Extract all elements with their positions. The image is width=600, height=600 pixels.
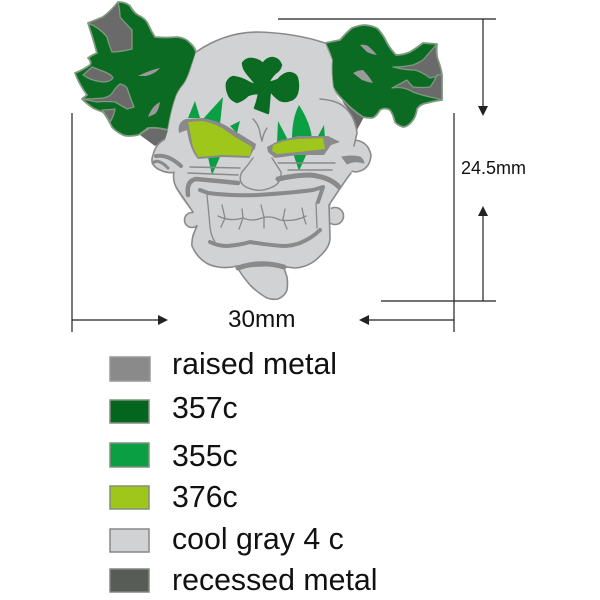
left hair	[75, 2, 196, 136]
upper lip and brow bands	[188, 175, 339, 246]
left hair recessed patches	[82, 2, 160, 122]
face	[165, 32, 356, 268]
legend: 357c	[110, 392, 238, 425]
ear details	[153, 156, 364, 168]
teeth lines	[207, 195, 317, 242]
left ear	[152, 136, 178, 173]
right hair recessed patches	[353, 45, 442, 100]
jaw bumps	[184, 212, 200, 228]
nose outline	[240, 158, 281, 190]
legend: 355c: 355c	[172, 440, 238, 473]
legend: recessed metal: recessed metal	[172, 564, 377, 597]
raised metal eye surround right	[267, 136, 340, 158]
legend: cool gray 4 c: cool gray 4 c	[172, 523, 344, 556]
nose	[240, 150, 281, 190]
dimension: height 24.5mm	[72, 19, 496, 332]
raised metal eye surround left	[179, 118, 256, 159]
right ear	[340, 140, 371, 172]
legend: 355c	[110, 440, 238, 473]
face outline	[174, 32, 357, 268]
legend: 357c: 357c	[172, 392, 238, 425]
tongue	[237, 265, 288, 299]
label: 24.5mm: 24.5mm	[461, 158, 526, 178]
clown head illustration	[75, 2, 442, 299]
legend: 376c	[110, 481, 238, 514]
tongue band	[238, 264, 284, 268]
right hair	[325, 25, 442, 127]
legend: raised metal: raised metal	[172, 348, 337, 381]
shamrock 357c	[227, 58, 298, 113]
left eye 376c	[188, 121, 252, 157]
cheek and brow creases	[188, 119, 335, 175]
right eye 376c	[272, 138, 325, 154]
green spikes 355c	[188, 97, 325, 175]
recessed metal behind hair	[140, 96, 364, 146]
label: 30mm: 30mm	[228, 306, 296, 333]
legend	[110, 348, 377, 597]
legend: 376c: 376c	[172, 481, 238, 514]
